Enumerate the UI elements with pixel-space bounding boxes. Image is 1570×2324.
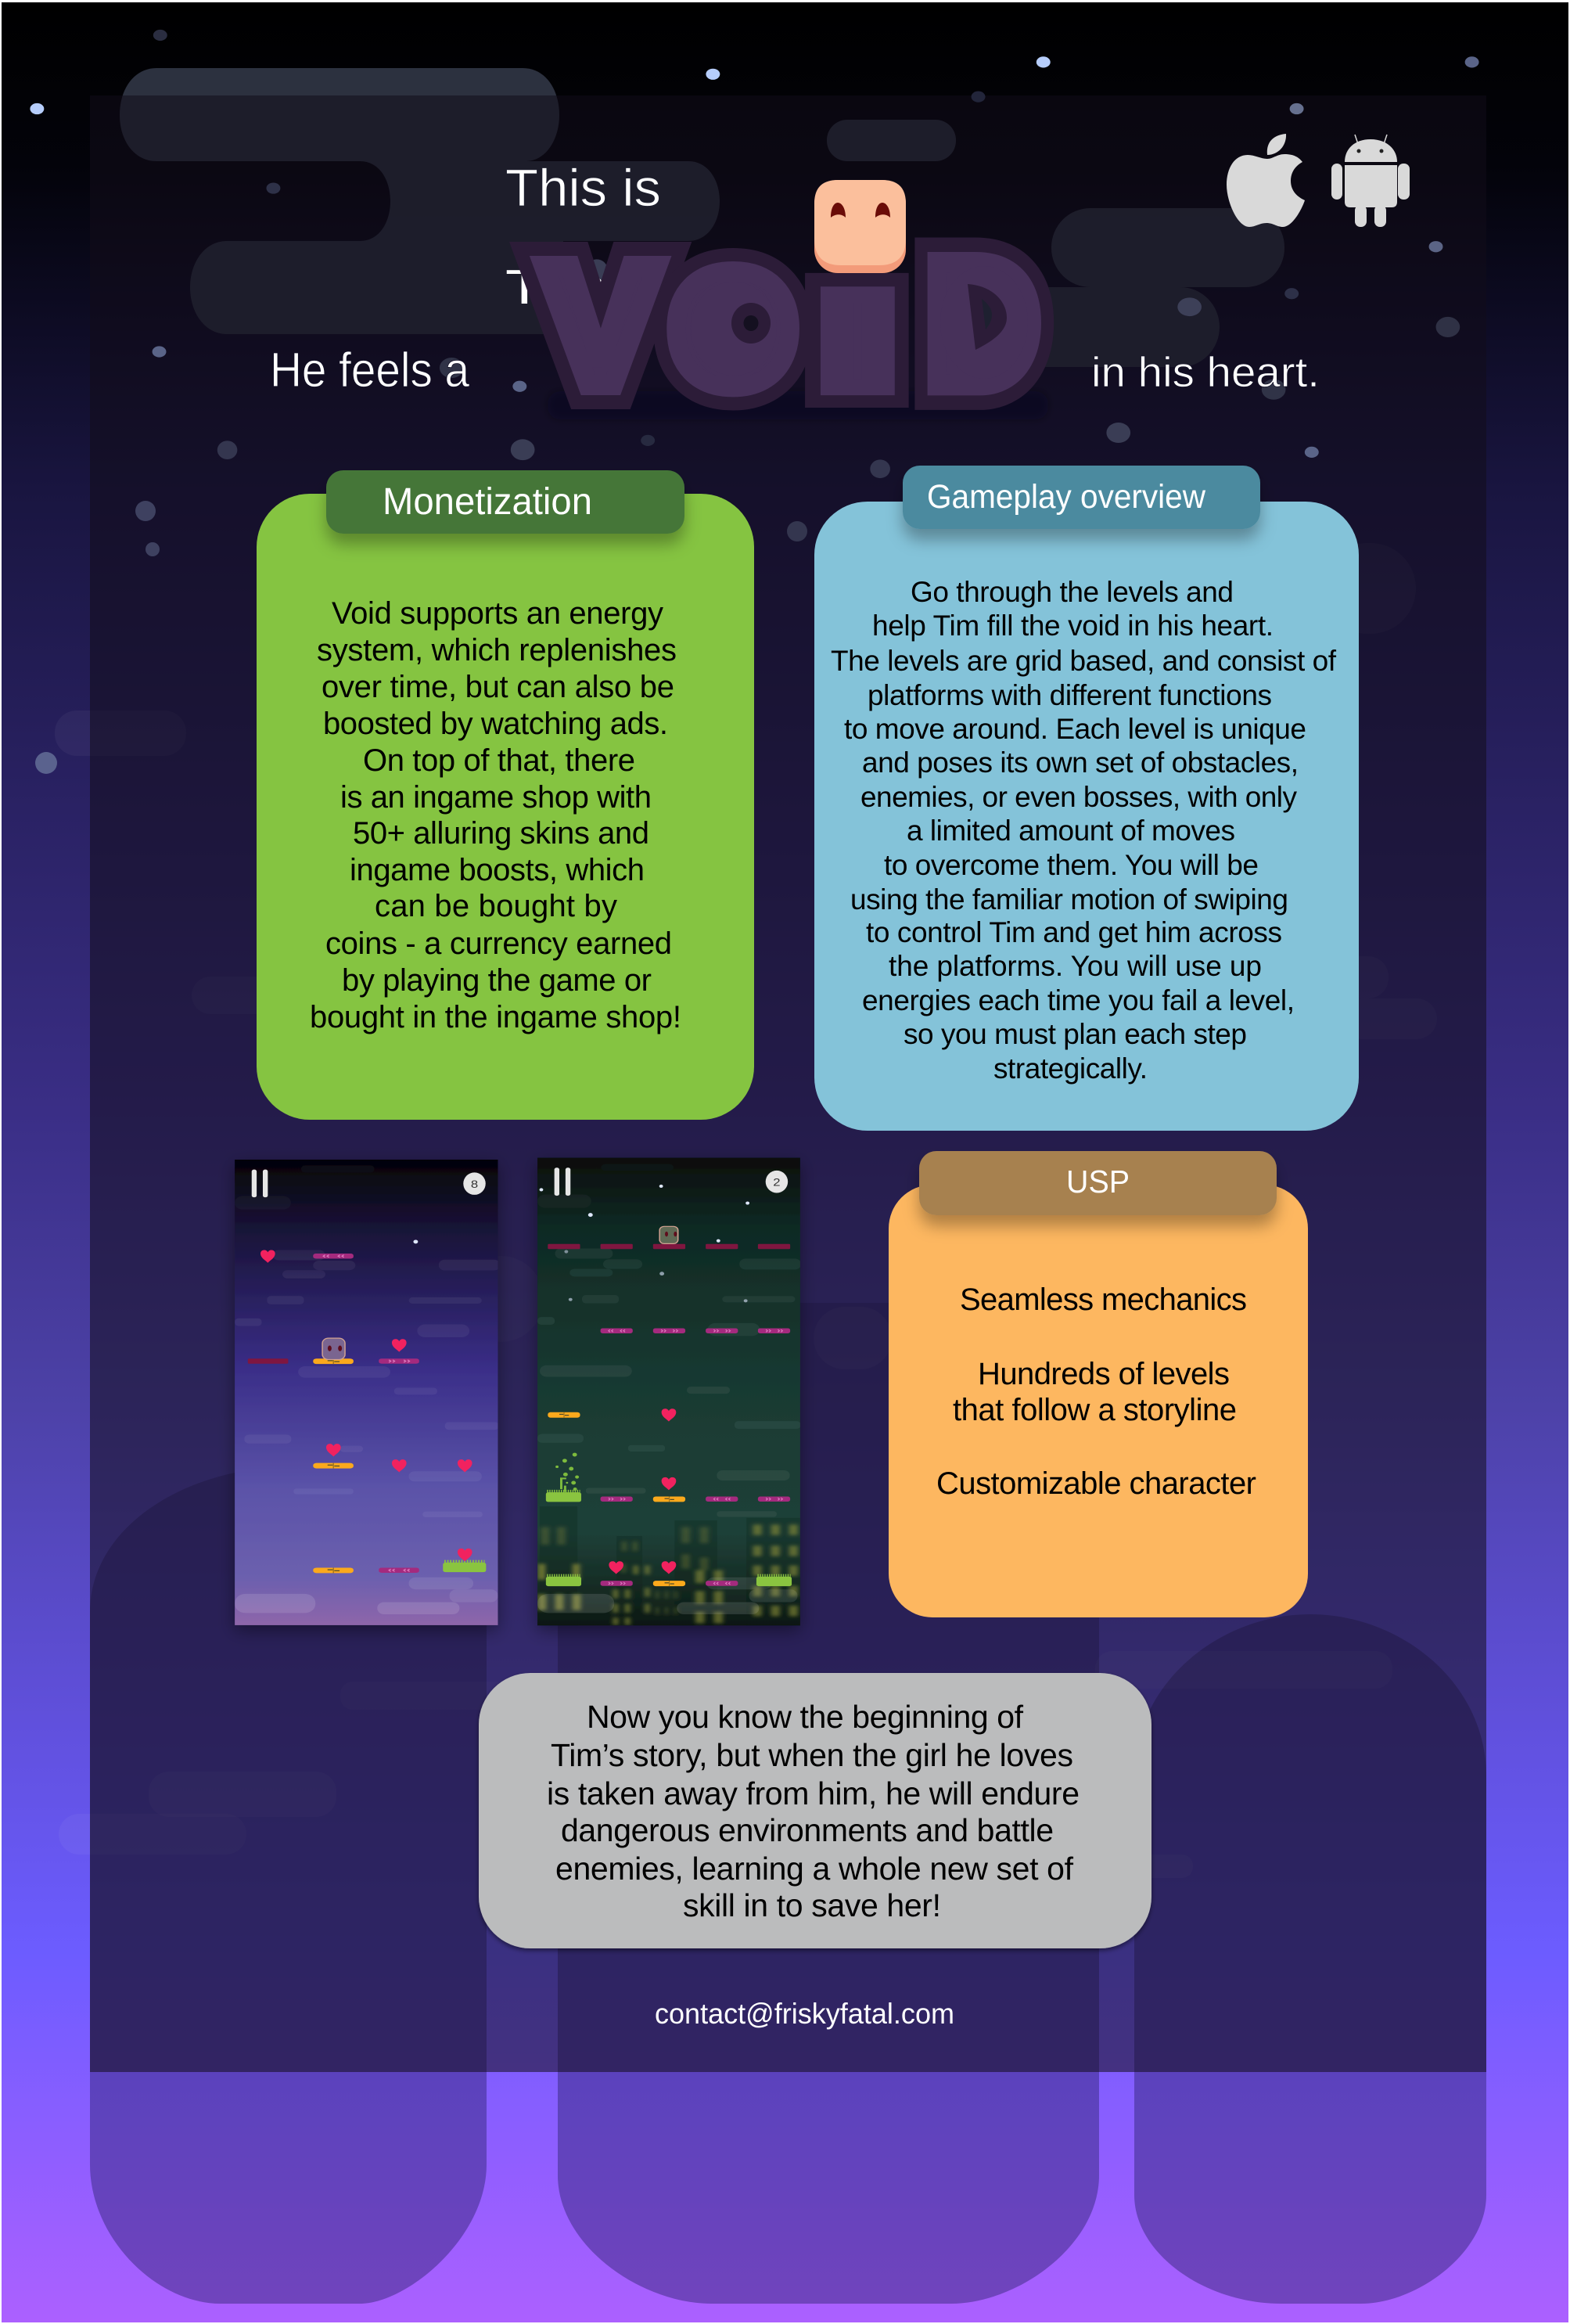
clouds behind the title bbox=[120, 68, 1284, 367]
contact email: contact@friskyfatal.com bbox=[655, 1998, 954, 2030]
VOID logo: V bbox=[543, 228, 658, 422]
VOID logo: D bbox=[926, 225, 1039, 423]
story text: is taken away from him, he will endure bbox=[547, 1775, 1080, 1811]
USP text: Hundreds of levels bbox=[978, 1357, 1230, 1391]
story text bbox=[547, 1699, 1080, 1923]
story text: dangerous environments and battle bbox=[561, 1812, 1054, 1848]
story text: enemies, learning a whole new set of bbox=[555, 1851, 1074, 1887]
faint mid-page clouds bbox=[55, 543, 1437, 1878]
stars bbox=[30, 30, 1479, 478]
monetization text: On top of that, there bbox=[363, 743, 635, 778]
screenshot: green level: 2 bbox=[773, 1177, 781, 1189]
bottom pillars bbox=[90, 1303, 1486, 2304]
heading: USP: USP bbox=[1066, 1164, 1130, 1200]
VOID logo: D bbox=[926, 225, 1039, 423]
gameplay text: enemies, or even bosses, with only bbox=[860, 781, 1297, 813]
eye left bbox=[831, 203, 846, 218]
USP text: that follow a storyline bbox=[953, 1393, 1237, 1427]
panel: closing story bbox=[479, 1673, 1151, 1948]
screenshot: green level bbox=[537, 1158, 801, 1625]
dark backdrop panel bbox=[90, 95, 1486, 2072]
title text: This is: This is bbox=[505, 159, 661, 218]
gameplay text: to overcome them. You will be bbox=[884, 849, 1259, 881]
heading: gameplay overview bbox=[903, 466, 1260, 529]
icon: android bbox=[1331, 135, 1410, 227]
screenshot: purple level bbox=[235, 1160, 500, 1625]
gameplay text: using the familiar motion of swiping bbox=[850, 883, 1288, 916]
heading: gameplay overview: Gameplay overview bbox=[927, 478, 1206, 516]
VOID logo: O bbox=[670, 238, 796, 421]
gameplay text: to control Tim and get him across bbox=[866, 916, 1282, 948]
story text: Tim’s story, but when the girl he loves bbox=[551, 1737, 1073, 1773]
gameplay text: the platforms. You will use up bbox=[889, 950, 1262, 982]
VOID logo bbox=[543, 225, 1048, 423]
monetization text: by playing the game or bbox=[342, 963, 652, 998]
VOID logo: O bbox=[670, 238, 796, 421]
monetization text: Void supports an energy bbox=[332, 596, 663, 631]
heading: monetization: Monetization bbox=[383, 481, 592, 523]
title text: in his heart: in his heart. bbox=[1091, 349, 1320, 396]
gameplay text: a limited amount of moves bbox=[907, 815, 1235, 847]
story text: skill in to save her! bbox=[683, 1887, 941, 1923]
gameplay text: platforms with different functions bbox=[868, 679, 1272, 711]
gameplay text: strategically. bbox=[993, 1052, 1148, 1085]
story text: Now you know the beginning of bbox=[587, 1699, 1024, 1735]
icon: apple bbox=[1227, 134, 1305, 227]
gameplay text bbox=[831, 576, 1337, 1085]
VOID logo: I bbox=[817, 257, 896, 423]
eye right bbox=[875, 203, 890, 218]
monetization text: is an ingame shop with bbox=[340, 780, 652, 815]
USP text: Customizable character bbox=[936, 1466, 1256, 1501]
title text: He feels a: He feels a bbox=[270, 344, 469, 398]
gameplay text: and poses its own set of obstacles, bbox=[862, 746, 1299, 779]
monetization text: system, which replenishes bbox=[317, 633, 677, 667]
heading: USP bbox=[919, 1151, 1277, 1215]
monetization text: 50+ alluring skins and bbox=[353, 816, 649, 851]
VOID logo: V bbox=[543, 228, 658, 422]
USP text bbox=[936, 1283, 1256, 1501]
gameplay text: help Tim fill the void in his heart. bbox=[872, 610, 1274, 642]
screenshot: purple level: 8 bbox=[471, 1178, 478, 1191]
gameplay text: Go through the levels and bbox=[911, 576, 1234, 608]
gameplay text: The levels are grid based, and consist of bbox=[831, 645, 1337, 677]
VOID logo: I bbox=[818, 266, 897, 416]
heading: monetization bbox=[326, 470, 684, 534]
monetization text: ingame boosts, which bbox=[350, 853, 645, 887]
panel: USP bbox=[889, 1151, 1308, 1617]
monetization text: boosted by watching ads. bbox=[323, 707, 668, 741]
USP text: Seamless mechanics bbox=[960, 1283, 1247, 1317]
gameplay text: to move around. Each level is unique bbox=[844, 713, 1306, 745]
monetization text bbox=[310, 596, 681, 1034]
monetization text: can be bought by bbox=[375, 889, 617, 923]
panel: monetization bbox=[257, 470, 754, 1120]
gameplay text: so you must plan each step bbox=[904, 1018, 1247, 1050]
monetization text: bought in the ingame shop! bbox=[310, 1000, 681, 1034]
title text: Tim (mostly hidden behind logo): Tim bbox=[505, 261, 607, 315]
character Tim bbox=[814, 180, 906, 273]
monetization text: coins - a currency earned bbox=[325, 926, 672, 961]
gameplay text: energies each time you fail a level, bbox=[862, 984, 1295, 1016]
panel: gameplay overview bbox=[814, 466, 1359, 1131]
monetization text: over time, but can also be bbox=[322, 670, 674, 704]
